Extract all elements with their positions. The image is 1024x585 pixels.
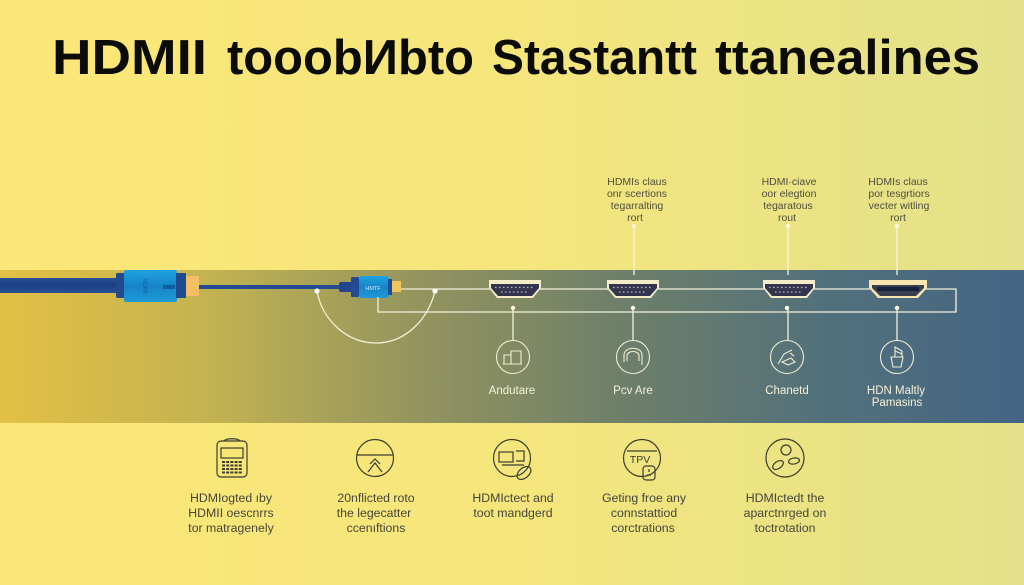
callout 3: vecter witling — [869, 200, 929, 212]
bottom item 5 — [744, 439, 827, 535]
connector lines — [378, 289, 956, 312]
bottom item 5: aparctnrged on — [744, 506, 827, 520]
callout 1: rort — [627, 212, 643, 224]
callout 2: tegaratous — [763, 200, 813, 212]
bottom item 1: HDMII oescnrrs — [188, 506, 274, 520]
small HDMI connector: HMTF — [365, 286, 381, 292]
bottom item 2 — [337, 440, 415, 535]
bottom item 2: 20nflicted roto — [337, 491, 415, 505]
callout 2 — [762, 176, 817, 275]
label: Pcv Are: Pcv Are — [613, 385, 653, 397]
label: Chanetd: Chanetd — [765, 385, 809, 397]
feature: HDN Maltly Pamasins: Pamasins — [872, 397, 922, 409]
callout 2: rout — [778, 212, 796, 224]
bottom item 4: connstattiod — [611, 506, 677, 520]
bottom item 4: corctrations — [611, 521, 675, 535]
callout 2: HDMI·ciave — [762, 176, 817, 188]
bottom item 2: the legecatter — [337, 506, 411, 520]
panel: gradient band — [0, 270, 1024, 423]
feature: HDN Maltly Pamasins — [867, 306, 925, 409]
callout 3: por tesgrtiors — [868, 188, 930, 200]
bottom item 4: Geting froe any — [602, 491, 687, 505]
callout 3 — [868, 176, 930, 275]
semicircle connector arc — [314, 288, 438, 343]
label: HDN Maltly Pamasins: HDN Maltly — [867, 385, 925, 397]
large HDMI cable — [0, 270, 199, 302]
thin cable — [199, 285, 341, 289]
port 2 — [607, 280, 659, 298]
icon: calculator — [217, 439, 247, 477]
callout 3: rort — [890, 212, 906, 224]
bottom item 3 — [472, 440, 554, 520]
port 3 — [763, 280, 815, 298]
icon: link circle — [766, 439, 804, 477]
feature: Andutare — [489, 306, 535, 397]
bottom item 4 — [602, 440, 687, 535]
bottom item 2: ccenıftions — [347, 521, 405, 535]
title: HDMII — [52, 31, 207, 85]
bottom item 5: HDMIctedt the — [746, 491, 824, 505]
bottom item 1: HDMIogted ıby — [190, 491, 273, 505]
callout 1: onr scertions — [607, 188, 667, 200]
bottom item 1: tor matragenely — [188, 521, 275, 535]
bottom item 1 — [188, 439, 275, 535]
callout 3: HDMIs claus — [868, 176, 928, 188]
large HDMI cable: HDMI — [141, 278, 147, 294]
title: ttanealines — [715, 31, 980, 85]
callout 2: oor elegtion — [762, 188, 817, 200]
title: tooobИbto — [227, 31, 474, 85]
callout 1: HDMIs claus — [607, 176, 667, 188]
callout 1 — [607, 176, 667, 275]
title — [52, 31, 980, 85]
bottom item 5: toctrotation — [755, 521, 816, 535]
callout 1: tegarralting — [611, 200, 663, 212]
port 4 — [869, 280, 927, 298]
bottom item 3: toot mandgerd — [473, 506, 553, 520]
port 1 — [489, 280, 541, 298]
small HDMI connector — [339, 276, 401, 298]
feature: Pcv Are — [613, 306, 653, 397]
title: Stastantt — [492, 31, 697, 85]
icon: monitor in circle — [494, 440, 533, 482]
icon: circle with chevrons — [356, 440, 394, 476]
label: Andutare: Andutare — [489, 385, 535, 397]
icon: TPV circle: TPV — [630, 454, 650, 466]
feature: Chanetd — [765, 306, 809, 397]
bottom item 3: HDMIctect and — [472, 491, 554, 505]
